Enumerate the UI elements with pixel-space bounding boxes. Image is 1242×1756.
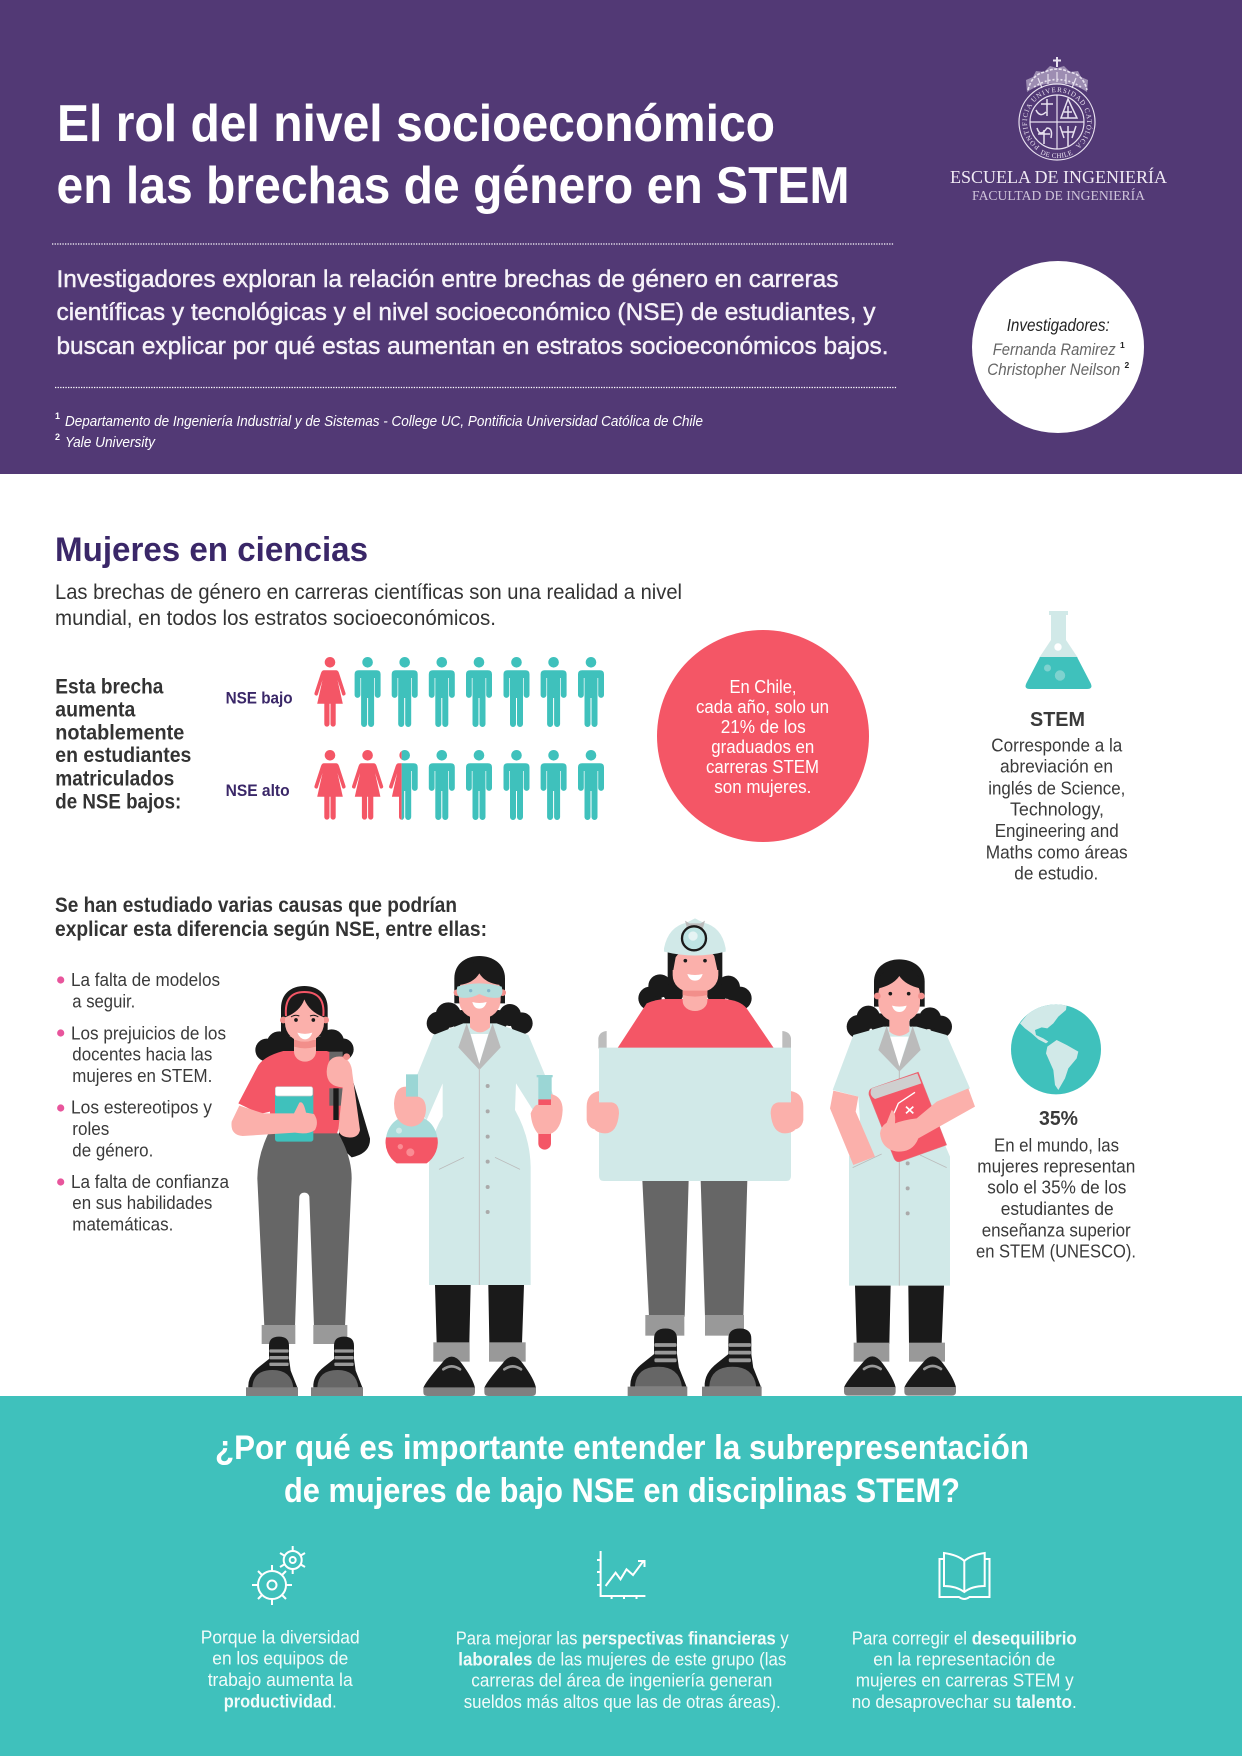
panel: STEM definition: Maths como áreas [986,841,1128,862]
callout: 21% red circle: carreras STEM [706,756,819,777]
subheading: causes [55,894,487,941]
label: NSE bajo: NSE bajo [226,688,293,708]
heading: why it matters: de mujeres de bajo NSE en disciplinas STEM? [284,1472,960,1510]
text: financial prospects [456,1629,789,1712]
icon: globe [1011,1003,1101,1094]
figure: engineer holding blueprint [587,918,803,1397]
icon: growth chart [597,1551,645,1599]
text: gap statement: matriculados [55,768,174,790]
panel: STEM definition: STEM [1030,708,1085,731]
logo: school name: FACULTAD DE INGENIERÍA [972,188,1145,203]
callout: 21% red circle: En Chile, [730,676,796,697]
list: causes: a seguir. [72,992,135,1012]
callout: 21% red circle: 21% de los [721,716,806,737]
text: productivity: Porque la diversidad [201,1628,360,1648]
figure: lab scientist with goggles [386,956,563,1396]
text: gap statement: en estudiantes [55,744,191,767]
panel: why it matters [0,1396,1242,1756]
text: imbalance: Para corregir el desequilibrio [852,1629,1077,1649]
text: gap statement: Esta brecha [55,676,164,698]
section intro text: Las brechas de género en carreras científicas son una realidad a nivel [55,581,682,604]
text: financial prospects: laborales de las mujeres de este grupo (las [458,1650,786,1670]
title: en las brechas de género en STEM [56,157,850,215]
pictogram: NSE alto row [314,750,604,820]
text: gap statement: aumenta [55,698,136,722]
text: productivity: en los equipos de [212,1648,348,1668]
researchers circle: Fernanda Ramirez [993,340,1116,359]
logo: school name: ESCUELA DE INGENIERÍA [950,167,1167,187]
text: productivity: trabajo aumenta la [208,1670,354,1690]
logo: university crest: DE CHILE [1040,150,1072,158]
text: imbalance: mujeres en carreras STEM y [856,1671,1074,1691]
footnotes [55,411,703,451]
panel: 35% statistic: mujeres representan [977,1156,1135,1177]
panel: header [0,0,1242,474]
panel: 35% statistic: enseñanza superior [982,1219,1131,1240]
list: causes: roles [72,1119,109,1139]
footnotes: Departamento de Ingeniería Industrial y de Sistemas - College UC, Pontificia Universidad Católica de Chile [65,413,703,430]
text: gap statement: notablemente [55,722,184,744]
list: causes: mujeres en STEM. [72,1066,212,1086]
list: causes [57,970,230,1234]
list: causes: de género. [72,1140,153,1160]
text: financial prospects: Para mejorar las perspectivas financieras y [456,1629,789,1649]
text: productivity: productividad. [224,1692,337,1712]
figure: scientist with math book [830,959,975,1396]
subheading: causes: Se han estudiado varias causas que podrían [55,894,457,917]
panel: STEM definition [986,708,1128,884]
callout: 21% red circle [657,630,869,842]
logo: university crest [1018,57,1096,161]
footnotes: 1 [55,411,60,421]
label: NSE alto: NSE alto [226,781,290,800]
title [56,95,850,215]
text: gap statement [55,676,191,814]
panel: STEM definition: abreviación en [1000,756,1113,777]
list: causes: matemáticas. [72,1214,173,1234]
text: imbalance: no desaprovechar su talento. [852,1692,1077,1712]
intro text: científicas y tecnológicas y el nivel socioeconómico (NSE) de estudiantes, y [56,299,876,326]
text: financial prospects: sueldos más altos que las de otras áreas). [464,1692,781,1712]
section intro text [55,581,682,630]
text: gap statement: de NSE bajos: [55,790,181,814]
panel: 35% statistic: 35% [1039,1107,1078,1130]
heading: Mujeres en ciencias: Mujeres en ciencias [55,531,368,569]
list: causes: Los estereotipos y [71,1098,212,1118]
text: financial prospects: carreras del área de ingeniería generan [471,1671,772,1691]
researchers circle: 1 [1120,340,1125,350]
footnotes: 2 [55,432,60,442]
intro text [56,266,888,360]
panel: 35% statistic: En el mundo, las [994,1135,1119,1156]
section intro text: mundial, en todos los estratos socioeconómicos. [55,607,496,630]
icon: flask [1026,611,1091,689]
heading: why it matters [215,1429,1029,1510]
subheading: causes: explicar esta diferencia según NSE, entre ellas: [55,918,487,941]
footnotes: Yale University [65,434,156,451]
intro text: buscan explicar por qué estas aumentan en estratos socioeconómicos bajos. [56,333,888,360]
logo: school name [950,167,1167,203]
figure: student [231,986,370,1396]
list: causes: La falta de confianza [71,1172,230,1192]
icon: gears [252,1546,305,1605]
text: productivity [201,1628,360,1712]
intro text: Investigadores exploran la relación entre brechas de género en carreras [56,266,838,293]
panel: 35% statistic [976,1107,1136,1262]
pictogram: NSE bajo row [314,657,604,727]
heading: why it matters: ¿Por qué es importante entender la subrepresentación [215,1429,1029,1467]
researchers circle: 2 [1124,360,1130,370]
researchers circle: Investigadores: [1007,315,1110,335]
panel: 35% statistic: estudiantes de [1001,1198,1114,1219]
panel: STEM definition: Corresponde a la [991,735,1123,756]
panel: 35% statistic: solo el 35% de los [987,1177,1126,1198]
text: imbalance: en la representación de [873,1650,1055,1670]
list: causes: La falta de modelos [71,970,220,990]
callout: 21% red circle: graduados en [711,736,814,757]
researchers circle: Christopher Neilson [987,360,1120,379]
list: causes: docentes hacia las [72,1045,212,1065]
callout: 21% red circle: son mujeres. [714,776,811,797]
title: El rol del nivel socioeconómico [57,95,775,153]
researchers circle [972,261,1144,433]
icon: open book [940,1553,990,1599]
callout: 21% red circle: cada año, solo un [696,696,829,717]
panel: STEM definition: Technology, [1010,799,1104,820]
list: causes: Los prejuicios de los [71,1023,226,1043]
panel: 35% statistic: en STEM (UNESCO). [976,1241,1136,1262]
panel: STEM definition: de estudio. [1014,863,1098,884]
panel: STEM definition: inglés de Science, [988,777,1125,798]
list: causes: en sus habilidades [72,1193,212,1213]
panel: STEM definition: Engineering and [995,820,1119,841]
logo: university crest: PONTIFICIA UNIVERSIDAD CATÓLICA [1022,87,1092,150]
text: imbalance [852,1629,1077,1712]
